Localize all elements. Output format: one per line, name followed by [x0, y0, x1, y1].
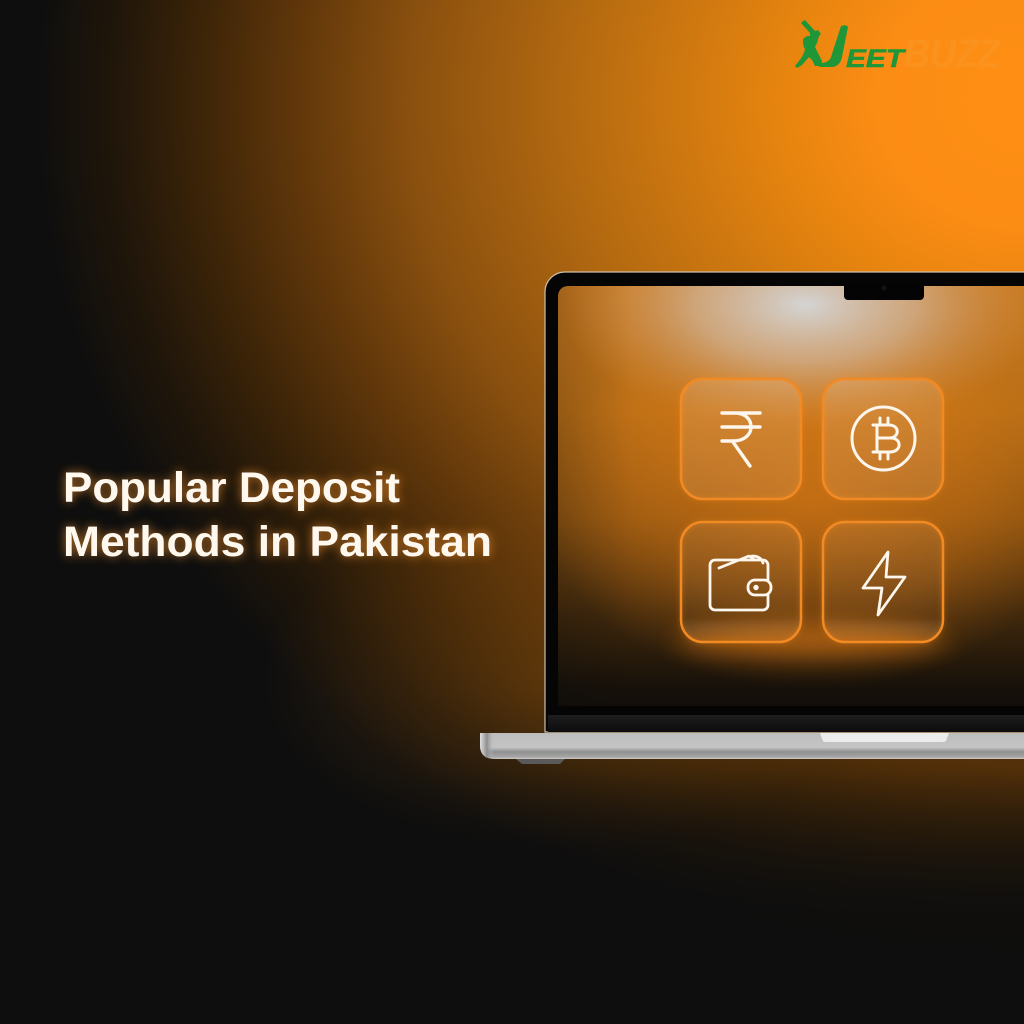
laptop base	[480, 733, 1024, 759]
laptop trackpad notch	[820, 733, 949, 742]
icon: wallet	[710, 556, 771, 610]
laptop base left highlight	[480, 733, 494, 759]
title glow: Popular Deposit	[63, 465, 400, 512]
laptop lid bezel	[545, 272, 1024, 732]
logo wordmark: EET	[846, 45, 907, 73]
icon tile: wallet	[681, 522, 801, 642]
laptop	[480, 272, 1024, 764]
title text: Methods in Pakistan	[63, 519, 492, 566]
title text	[63, 465, 492, 566]
icon: bitcoin	[852, 407, 915, 470]
tile glow	[677, 624, 947, 656]
icon tile: lightning bolt	[823, 522, 943, 642]
icon tile: rupee	[681, 379, 801, 499]
icon tile: bitcoin	[823, 379, 943, 499]
logo icon: cricket batter	[795, 20, 822, 68]
laptop screen	[540, 284, 1024, 708]
title text: Popular Deposit	[63, 465, 400, 512]
title	[63, 465, 492, 566]
lower bezel bar	[548, 715, 1024, 732]
icon: lightning bolt	[863, 552, 905, 615]
logo wordmark	[819, 25, 1001, 76]
title glow	[63, 465, 492, 566]
title glow: Methods in Pakistan	[63, 519, 492, 566]
logo wordmark: BUZZ	[904, 32, 1001, 76]
notch	[844, 284, 924, 300]
logo: JeetBuzz	[795, 20, 1001, 76]
icon: rupee	[722, 413, 760, 466]
laptop foot	[516, 759, 565, 764]
